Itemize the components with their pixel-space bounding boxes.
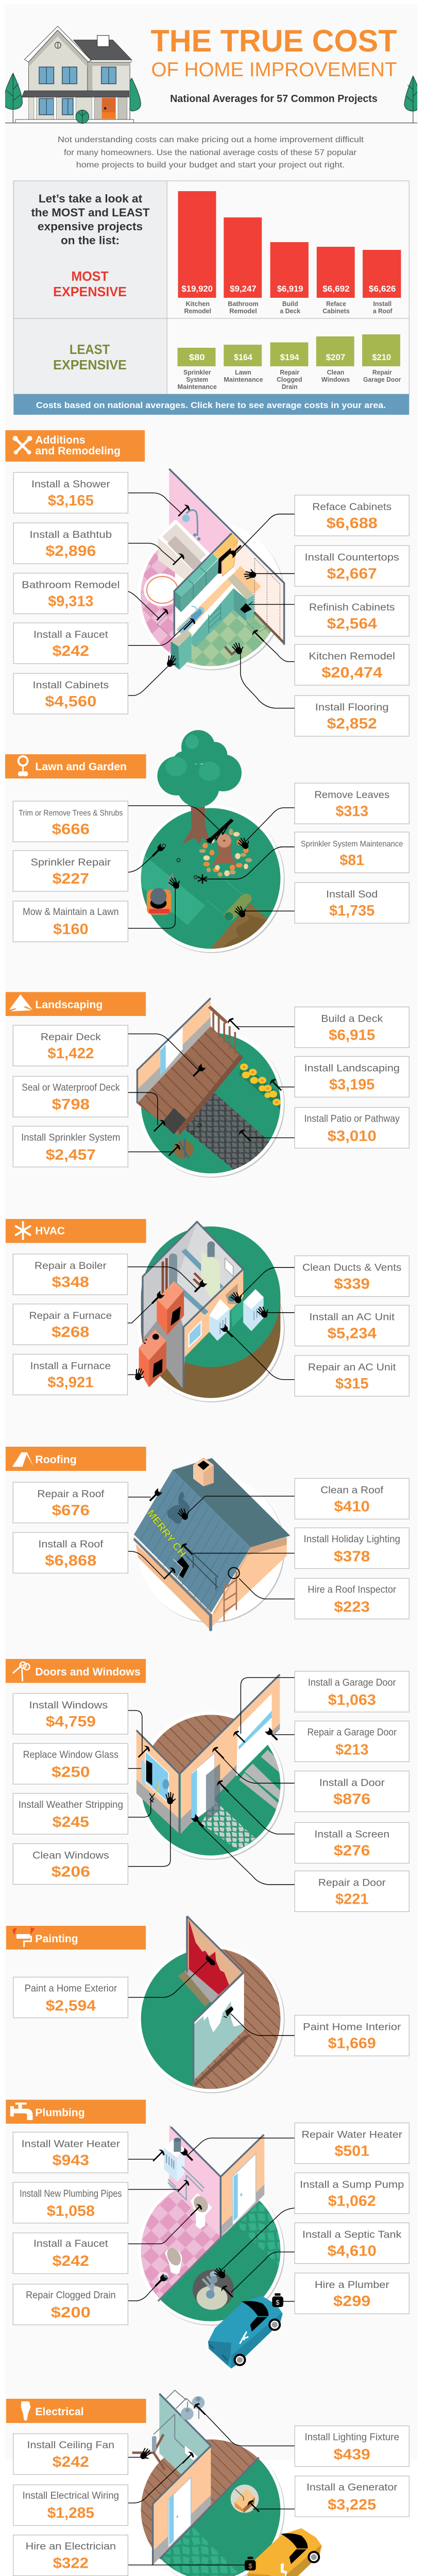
price box: install cabinets (13, 673, 128, 714)
price box: trim or remove trees and shrubs: Trim or Remove Trees & Shrubs (19, 809, 123, 818)
illustration: house with trees (3, 26, 421, 124)
price box: install ceiling fan: Install Ceiling Fan (27, 2440, 114, 2451)
price box: paint a home exterior: Paint a Home Exterior (25, 1983, 117, 1994)
price box: repair a furnace: $268 (52, 1324, 90, 1341)
price box: install a sump pump: Install a Sump Pump (300, 2179, 404, 2191)
illustration: house roof (128, 1457, 295, 1630)
heading: hvac: HVAC (35, 1225, 65, 1237)
heading: plumbing (6, 2100, 146, 2124)
leaders and tools (lower) (128, 2252, 295, 2301)
price box: install a screen (295, 1823, 409, 1863)
price box: kitchen remodel (295, 645, 409, 685)
price box: install holiday lighting: Install Holiday Lighting (304, 1534, 400, 1545)
section: landscaping (6, 992, 409, 1190)
title: THE TRUE COST (151, 24, 397, 58)
illustration: deck and patio (124, 997, 295, 1190)
bar chart: least expensive: Repair (372, 369, 392, 376)
bar chart: least expensive: Windows (321, 376, 350, 383)
bar chart: most expensive: $6,692 (322, 284, 350, 294)
section: additions and remodeling (5, 430, 409, 736)
price box: repair a boiler: Repair a Boiler (35, 1261, 107, 1272)
price box: hire a roof inspector: $223 (334, 1599, 370, 1616)
bar chart: most expensive: $6,919 (277, 284, 303, 294)
heading: doors and windows: Doors and Windows (35, 1666, 141, 1678)
price box: trim or remove trees and shrubs (13, 801, 128, 842)
price box: install sprinkler system: Install Sprinkler System (21, 1132, 121, 1143)
section: lawn and garden (5, 730, 409, 959)
tagline: National Averages for 57 Common Projects (170, 93, 378, 105)
leaders and tools (128, 2402, 295, 2565)
price box: mow and maintain a lawn (13, 901, 128, 942)
price box: install water heater (13, 2132, 128, 2173)
bar chart: least expensive: $210 (372, 352, 391, 362)
price box: replace window glass: Replace Window Glass (23, 1750, 118, 1760)
question text: the MOST and LEAST (31, 206, 150, 219)
price box: build a deck: $6,915 (329, 1027, 375, 1044)
price box: sprinkler system maintenance: Sprinkler System Maintenance (301, 840, 403, 849)
heading: lawn and garden: Lawn and Garden (35, 761, 127, 773)
price box: install a shower: $3,165 (48, 493, 94, 509)
price box: install a roof: Install a Roof (38, 1539, 104, 1550)
leaders and tools (upper) (128, 2138, 295, 2274)
price box: repair an ac unit (295, 1355, 409, 1396)
price box: install flooring (295, 696, 409, 736)
bar chart: most expensive: Build (282, 300, 298, 308)
bar chart: least expensive: Lawn (235, 369, 251, 376)
price box: install sod: Install Sod (326, 889, 378, 900)
price box: clean ducts and vents: Clean Ducts & Vents (302, 1262, 401, 1274)
price box: repair water heater: Repair Water Heater (302, 2129, 402, 2141)
price box: build a deck: Build a Deck (321, 1013, 383, 1025)
bar chart: most expensive: a Roof (373, 308, 393, 315)
price box: install a door: Install a Door (319, 1777, 385, 1789)
intro text: home projects to build your budget and start your project out right. (76, 161, 345, 170)
price box: install countertops (295, 546, 409, 586)
price box: repair water heater (295, 2123, 409, 2164)
price box: install a faucet (13, 623, 128, 664)
price box: install a roof (13, 1532, 128, 1573)
heading: painting: Painting (35, 1933, 78, 1945)
price box: install a bathtub: Install a Bathtub (30, 530, 112, 540)
price box: install a door (295, 1771, 409, 1811)
price box: repair deck (13, 1025, 128, 1066)
heading: plumbing: Plumbing (35, 2107, 85, 2119)
illustration: lawn with tree (128, 730, 295, 959)
price box: kitchen remodel: Kitchen Remodel (309, 651, 395, 662)
price box: install a door: $876 (333, 1791, 370, 1808)
price box: refinish cabinets: $2,564 (327, 616, 377, 632)
price box: install holiday lighting (295, 1528, 409, 1568)
bar chart: least expensive: System (186, 376, 208, 383)
bar chart: least expensive: $207 (326, 352, 345, 362)
heading: landscaping: Landscaping (35, 999, 103, 1011)
price box: install a furnace: Install a Furnace (30, 1361, 111, 1372)
price box: repair a garage door: Repair a Garage Door (307, 1727, 397, 1738)
price box: install holiday lighting: $378 (334, 1548, 370, 1565)
price box: install a septic tank (295, 2223, 409, 2264)
price box: install an ac unit: Install an AC Unit (309, 1312, 395, 1323)
price box: install flooring: $2,852 (327, 716, 377, 732)
price box: install a sump pump (295, 2173, 409, 2213)
price box: paint home interior (295, 2015, 409, 2056)
price box: clean a roof (295, 1479, 409, 1519)
bar chart: least expensive: $80 (189, 352, 205, 362)
bar chart: most expensive: $19,920 (182, 284, 213, 294)
price box: install windows: Install Windows (29, 1700, 108, 1711)
illustration: doors and windows (125, 1674, 295, 1885)
price box: repair a boiler (13, 1254, 127, 1295)
bar chart: most expensive: Remodel (184, 308, 211, 315)
price box: install water heater: Install Water Heater (22, 2139, 120, 2150)
price box: install lighting fixture: $439 (334, 2446, 370, 2463)
price box: replace window glass: $250 (52, 1764, 90, 1781)
heading: additions and remodeling: and Remodeling (35, 445, 121, 457)
price box: install a garage door: $1,063 (328, 1692, 376, 1708)
price box: install windows: $4,759 (46, 1714, 96, 1730)
price box: install landscaping: Install Landscaping (304, 1063, 400, 1074)
price box: repair deck: $1,422 (47, 1045, 94, 1062)
question text: expensive projects (38, 220, 143, 233)
bar chart: most expensive: Remodel (229, 308, 257, 315)
illustration: electrical room (128, 2390, 322, 2576)
price box: trim or remove trees and shrubs: $666 (52, 821, 90, 838)
icon: money bag: $ (248, 2563, 252, 2570)
footnote banner: Costs based on national averages. Click here to see average costs in your area. (36, 400, 386, 410)
bar chart: least expensive: Repair (280, 369, 299, 376)
price box: install a shower (13, 472, 128, 513)
price box: install weather stripping: $245 (53, 1814, 89, 1831)
price box: install a generator (295, 2476, 409, 2517)
label: most expensive (53, 269, 127, 299)
intro text (58, 135, 364, 170)
price box: install patio or pathway: $3,010 (328, 1128, 377, 1145)
price box: repair an ac unit: $315 (335, 1376, 368, 1392)
price box: install cabinets: Install Cabinets (32, 680, 109, 691)
question text: on the list: (61, 234, 120, 247)
bar chart: least expensive: Clean (327, 369, 344, 376)
intro text: for many homeowners. Use the national average costs of these 57 popular (64, 148, 356, 157)
price box: install sod: $1,735 (329, 903, 374, 919)
heading: doors and windows (6, 1659, 146, 1683)
label: least expensive (53, 343, 127, 372)
price box: hire a plumber: Hire a Plumber (315, 2280, 389, 2291)
price box: install new plumbing pipes: $1,058 (47, 2203, 95, 2219)
price box: repair clogged drain: Repair Clogged Drain (26, 2290, 116, 2301)
heading: hvac (6, 1219, 146, 1243)
price box: hire a plumber (295, 2273, 409, 2314)
bar chart: most expensive: $6,626 (369, 284, 396, 294)
price box: hire a roof inspector (295, 1579, 409, 1619)
price box: install a faucet: Install a Faucet (33, 630, 109, 640)
price box: install new plumbing pipes: Install New Plumbing Pipes (20, 2189, 122, 2199)
price box: repair a boiler: $348 (52, 1274, 89, 1291)
price box: install electrical wiring (13, 2485, 128, 2526)
label: least expensive: EXPENSIVE (53, 358, 127, 372)
heading: additions and remodeling (5, 430, 145, 462)
price box: mow and maintain a lawn: $160 (53, 921, 89, 938)
price box: sprinkler repair (13, 851, 128, 891)
price box: install a shower: Install a Shower (31, 479, 110, 490)
price box: hire a roof inspector: Hire a Roof Inspector (308, 1584, 396, 1596)
heading: additions and remodeling: Additions (35, 434, 86, 446)
question text: Let’s take a look at (39, 192, 143, 205)
bar chart: most expensive (178, 191, 401, 315)
heading: roofing (6, 1447, 146, 1471)
bar chart: most expensive: $9,247 (230, 284, 257, 294)
price box: paint a home exterior: $2,594 (46, 1997, 96, 2014)
bar chart: most expensive: Kitchen (185, 300, 210, 308)
price box: install water heater: $943 (53, 2152, 89, 2169)
intro text: Not understanding costs can make pricing out a home improvement difficult (58, 135, 364, 144)
illustration: bathroom and septic (128, 2124, 295, 2368)
heading: roofing: Roofing (35, 1454, 77, 1466)
bar chart: least expensive: $164 (234, 352, 252, 362)
price box: remove leaves: $313 (335, 803, 368, 820)
price box: seal or waterproof deck: $798 (52, 1096, 90, 1113)
price box: install patio or pathway: Install Patio or Pathway (304, 1113, 400, 1125)
bar chart: least expensive: Sprinkler (183, 369, 211, 376)
price box: clean windows (13, 1843, 128, 1885)
subtitle: OF HOME IMPROVEMENT (151, 59, 397, 81)
price box: install weather stripping (13, 1793, 128, 1834)
price box: remove leaves (295, 783, 409, 824)
heading: landscaping (6, 992, 146, 1016)
price box: repair clogged drain: $200 (51, 2304, 91, 2321)
price box: install a garage door (295, 1671, 409, 1712)
price box: refinish cabinets (295, 596, 409, 636)
price box: install landscaping: $3,195 (329, 1076, 374, 1093)
bar chart: most expensive: Reface (326, 300, 346, 308)
price box: paint a home exterior (13, 1977, 128, 2018)
price box: hire an electrician: Hire an Electrician (26, 2541, 116, 2552)
bar chart: least expensive: Clogged (277, 376, 302, 383)
price box: clean ducts and vents: $339 (334, 1276, 370, 1293)
price box: repair a garage door: $213 (335, 1741, 368, 1758)
price box: install an ac unit: $5,234 (328, 1325, 377, 1342)
price box: install a screen: Install a Screen (314, 1829, 389, 1840)
bar chart: least expensive: Maintenance (178, 383, 217, 391)
section: roofing (6, 1447, 409, 1630)
price box: install a garage door: Install a Garage Door (308, 1677, 396, 1688)
price box: install a faucet: $242 (53, 643, 89, 659)
price box: seal or waterproof deck (13, 1076, 128, 1117)
price box: repair deck: Repair Deck (41, 1032, 101, 1043)
electrician van (247, 2528, 322, 2576)
price box: refinish cabinets: Refinish Cabinets (309, 602, 395, 613)
price box: bathroom remodel (13, 573, 128, 614)
price box: repair a door: $221 (335, 1891, 368, 1908)
price box: reface cabinets (295, 495, 409, 536)
heading: lawn and garden (5, 754, 146, 778)
price box: reface cabinets: $6,688 (327, 515, 378, 532)
price box: sprinkler system maintenance: $81 (339, 852, 364, 869)
price box: install countertops: Install Countertops (304, 552, 399, 563)
price box: install a furnace: $3,921 (47, 1374, 93, 1391)
price box: clean a roof: $410 (334, 1498, 370, 1515)
price box: repair an ac unit: Repair an AC Unit (308, 1362, 396, 1373)
price box: install windows (13, 1693, 128, 1734)
question text (31, 192, 150, 247)
price box: repair a roof: $676 (52, 1502, 90, 1519)
price box: install new plumbing pipes (13, 2182, 128, 2223)
price box: install sod (295, 883, 409, 923)
price box: install lighting fixture (295, 2426, 409, 2467)
price box: install countertops: $2,667 (327, 566, 377, 582)
section: hvac (6, 1219, 409, 1402)
price box: kitchen remodel: $20,474 (321, 665, 382, 681)
bar chart: least expensive: $194 (280, 352, 299, 362)
price box: install flooring: Install Flooring (315, 702, 389, 713)
price box: install landscaping (295, 1056, 409, 1097)
price box: sprinkler repair: Sprinkler Repair (30, 857, 111, 868)
price box: install a faucet: $242 (53, 2253, 89, 2269)
price box: repair a door: Repair a Door (318, 1877, 386, 1889)
header (3, 24, 421, 124)
price box: clean ducts and vents (295, 1256, 409, 1296)
footnote banner (13, 394, 409, 415)
price box: paint home interior: Paint Home Interior (303, 2022, 401, 2033)
price box: install ceiling fan (13, 2434, 128, 2475)
bar chart: most expensive: Bathroom (228, 300, 259, 308)
price box: hire an electrician (13, 2535, 128, 2576)
label: least expensive: LEAST (70, 343, 110, 357)
price box: install lighting fixture: Install Lighting Fixture (304, 2432, 399, 2443)
price box: install electrical wiring: $1,285 (47, 2505, 94, 2521)
price box: install a septic tank: Install a Septic Tank (302, 2229, 402, 2241)
illustration: kitchen and bathroom (132, 469, 285, 675)
price box: install a generator: $3,225 (328, 2497, 376, 2513)
price box: sprinkler repair: $227 (53, 871, 89, 887)
price box: repair clogged drain (13, 2284, 128, 2325)
price box: hire an electrician: $322 (53, 2555, 89, 2572)
price box: repair a roof: Repair a Roof (37, 1489, 105, 1500)
icon: money bag (245, 2557, 256, 2570)
price box: repair a roof (13, 1482, 128, 1523)
icon: money bag (272, 2293, 283, 2307)
tree canopy (157, 730, 242, 807)
leaders and tools (128, 493, 295, 708)
price box: install a sump pump: $1,062 (328, 2193, 376, 2210)
price box: install patio or pathway (295, 1108, 409, 1148)
heading: electrical: Electrical (35, 2406, 84, 2418)
price box: replace window glass (13, 1743, 128, 1784)
label: most expensive: MOST (71, 269, 109, 284)
bar chart: least expensive: Maintenance (224, 376, 263, 383)
illustration: painted walls (128, 1916, 295, 2093)
price box: bathroom remodel: $9,313 (48, 593, 93, 610)
price box: repair a furnace (13, 1304, 127, 1345)
price box: install a furnace (13, 1354, 127, 1395)
label: most expensive: EXPENSIVE (53, 285, 127, 299)
price box: hire a plumber: $299 (333, 2293, 370, 2310)
section: electrical (6, 2390, 409, 2576)
section: painting (6, 1916, 409, 2093)
panel: most and least expensive table (13, 181, 409, 415)
icon: money bag: $ (276, 2299, 279, 2307)
price box: seal or waterproof deck: Seal or Waterproof Deck (22, 1082, 120, 1093)
price box: mow and maintain a lawn: Mow & Maintain a Lawn (23, 907, 119, 918)
price box: install cabinets: $4,560 (45, 693, 96, 710)
price box: build a deck (295, 1007, 409, 1048)
price box: install a generator: Install a Generator (306, 2482, 397, 2493)
bar chart: least expensive: Garage Door (363, 376, 401, 383)
price box: install a faucet: Install a Faucet (33, 2239, 109, 2249)
bar chart: least expensive (178, 334, 401, 391)
bar chart: most expensive: a Deck (280, 308, 300, 315)
holiday sign lettering: MERRY CH (145, 1507, 188, 1560)
price box: install a faucet (13, 2233, 128, 2274)
price box: install a septic tank: $4,610 (328, 2243, 377, 2260)
price box: install a roof: $6,868 (45, 1552, 96, 1569)
heading: electrical (6, 2399, 146, 2423)
bar chart: most expensive: Cabinets (322, 308, 350, 315)
price box: clean windows: Clean Windows (32, 1850, 109, 1861)
price box: repair a garage door (295, 1721, 409, 1762)
price box: clean a roof: Clean a Roof (320, 1485, 384, 1496)
plumber van (208, 2296, 283, 2368)
section: doors and windows (6, 1659, 409, 1911)
price box: repair a door (295, 1871, 409, 1911)
price box: repair water heater: $501 (335, 2143, 369, 2160)
price box: install sprinkler system: $2,457 (46, 1147, 96, 1163)
price box: install electrical wiring: Install Electrical Wiring (23, 2490, 119, 2501)
price box: install a bathtub (13, 523, 128, 564)
heading: painting (6, 1926, 146, 1950)
price box: install an ac unit (295, 1306, 409, 1346)
price box: install a screen: $276 (334, 1842, 370, 1859)
price box: bathroom remodel: Bathroom Remodel (22, 580, 120, 591)
price box: install sprinkler system (13, 1126, 128, 1167)
price box: remove leaves: Remove Leaves (314, 790, 389, 801)
price box: install a bathtub: $2,896 (45, 543, 96, 560)
bar chart: least expensive: Drain (282, 383, 298, 391)
price box: paint home interior: $1,669 (328, 2035, 376, 2052)
section: plumbing (6, 2100, 409, 2368)
price box: clean windows: $206 (52, 1863, 90, 1880)
bar chart: most expensive: Install (373, 300, 391, 308)
price box: reface cabinets: Reface Cabinets (312, 502, 391, 513)
price box: sprinkler system maintenance (295, 832, 409, 873)
illustration: hvac room (128, 1222, 295, 1402)
price box: install ceiling fan: $242 (53, 2454, 89, 2470)
leaders and tools (128, 1488, 295, 1599)
price box: install weather stripping: Install Weather Stripping (19, 1800, 123, 1810)
price box: repair a furnace: Repair a Furnace (29, 1311, 112, 1321)
